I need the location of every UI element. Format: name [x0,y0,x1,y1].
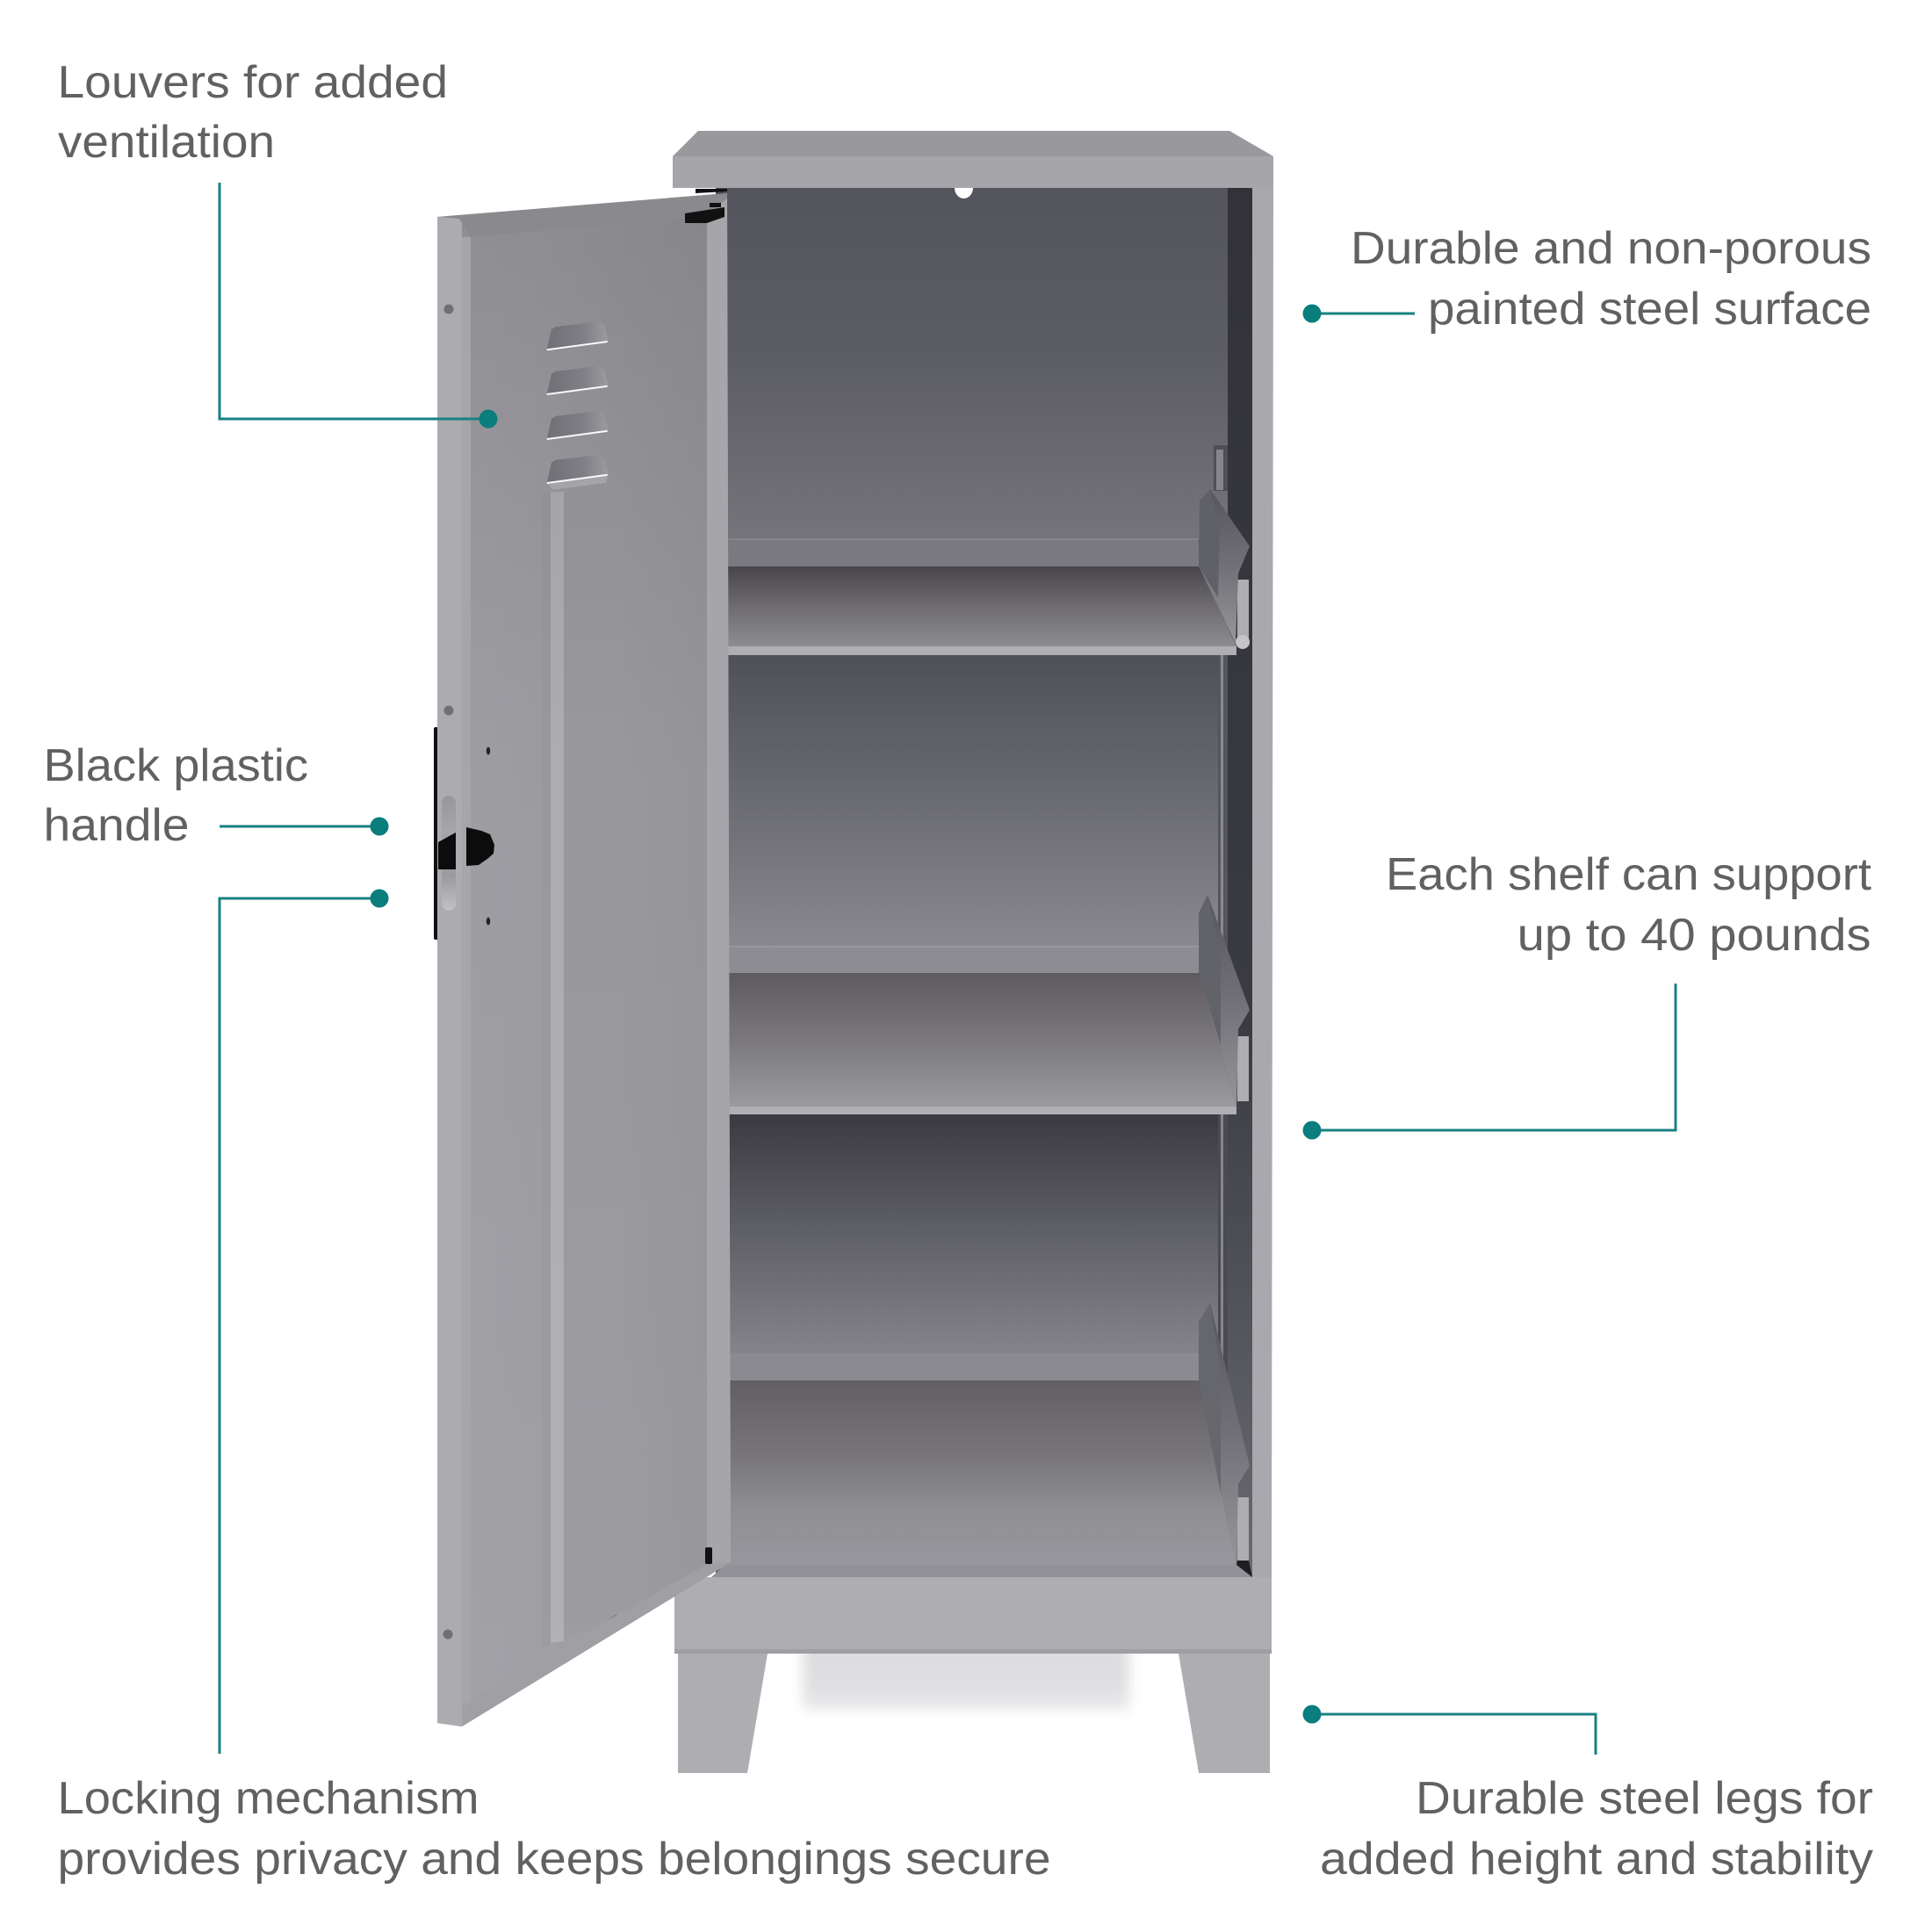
text: lock [58,1773,1050,1885]
text: legs: Durable steel legs for [1416,1773,1873,1824]
middle shelf [724,895,1250,1114]
black lock handle [438,796,494,911]
text: legs [1320,1773,1873,1885]
cabinet base [674,1577,1272,1654]
rear rail posts [1218,655,1228,1369]
back wall top compartment [724,188,1228,539]
door hinges [685,189,727,1564]
text: surface [1351,223,1871,335]
door bottom flange [462,1562,731,1727]
door pressed panel [542,492,616,1654]
door right edge band [707,193,731,1564]
text: shelf capacity: Each shelf can support [1386,849,1872,900]
open door [434,189,731,1727]
locker [434,131,1273,1773]
leader line: shelf capacity [1303,984,1676,1140]
callout: louvers [58,57,497,429]
right frame [1252,188,1273,1577]
callout: black plastic handle [44,740,388,851]
leader line: louvers [220,183,497,429]
door body [437,193,731,1727]
text: surface: Durable and non-porous [1351,223,1871,274]
callout: shelf capacity [1303,849,1872,1140]
right leg [1179,1654,1270,1773]
text: shelf capacity [1386,849,1872,961]
icon: door louvers [547,321,609,490]
text: louvers: ventilation [58,117,275,168]
text: handle [44,740,308,851]
leader line: handle [220,817,388,836]
bottom shelf floor [724,1303,1252,1577]
door top flange [437,193,727,237]
back wall bottom compartment [724,1114,1218,1354]
door handle back plate [434,727,438,940]
callout: painted steel surface [1303,223,1871,335]
cabinet lower lip [711,1565,1252,1577]
top shelf [724,445,1250,655]
callout: locking mechanism [58,889,1050,1885]
door left edge band [437,217,462,1727]
cabinet top surface [673,131,1273,156]
text: lock: provides privacy and keeps belongings secure [58,1834,1050,1885]
text: surface: painted steel surface [1428,284,1871,335]
leader line: lock [220,889,388,1754]
callout: steel legs [1303,1705,1873,1885]
text: handle: handle [44,800,190,851]
text: louvers: Louvers for added [58,57,448,108]
shadow under locker [799,1654,1133,1712]
text: lock: Locking mechanism [58,1773,479,1824]
text: louvers [58,57,448,168]
text: shelf capacity: up to 40 pounds [1517,910,1871,961]
text: handle: Black plastic [44,740,308,791]
right inner side strip [1228,188,1252,1577]
interior backing [716,188,1253,1577]
door shading [462,215,707,1727]
back wall middle compartment [724,655,1218,947]
door screws [443,304,490,1639]
leader line: legs [1303,1705,1596,1755]
hanging hole [955,188,973,198]
left leg [678,1654,768,1773]
cabinet top front edge [673,156,1273,188]
leader line: surface [1303,304,1415,323]
text: legs: added height and stability [1320,1834,1873,1885]
